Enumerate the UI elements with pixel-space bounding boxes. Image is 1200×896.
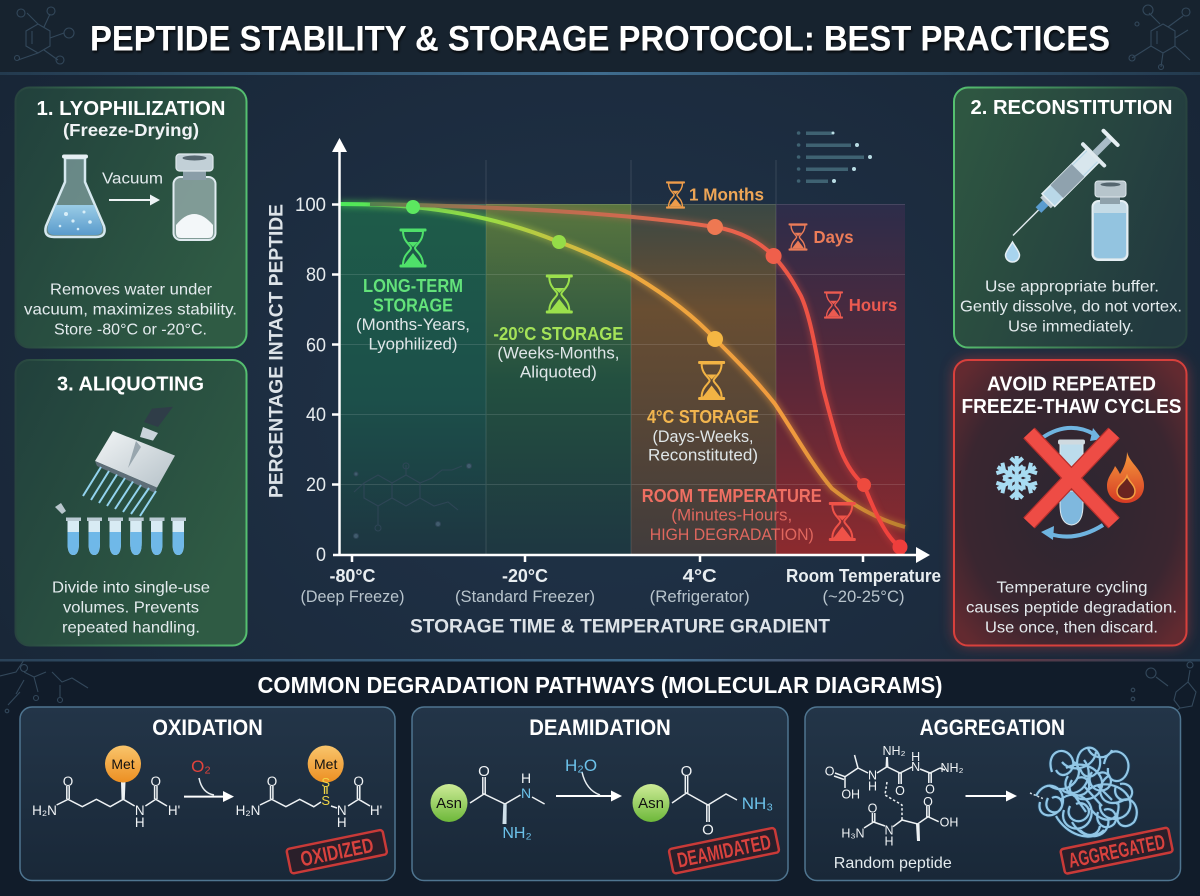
label: random peptide: Random peptide — [834, 855, 952, 872]
molecule: deamidated product: O — [681, 763, 692, 780]
text: freeze-thaw description: causes peptide degradation. — [966, 600, 1177, 616]
icon: red cross — [1029, 433, 1114, 523]
arrow: oxidation reaction: O₂ — [191, 757, 211, 776]
heading: avoid freeze-thaw cycles — [962, 372, 1182, 418]
icon: top-right molecule decoration — [1129, 5, 1190, 70]
icon: tube — [1058, 440, 1085, 525]
molecule: random peptide: N — [911, 760, 920, 774]
molecule: oxidized methionine: N — [337, 803, 347, 818]
chart zone: -20C band — [486, 204, 631, 555]
chart zone: 4C band — [631, 204, 776, 555]
y axis labels: 100 — [295, 195, 326, 216]
y axis labels: 80 — [306, 265, 326, 286]
text: lyophilization description — [24, 282, 237, 338]
icon: flask — [45, 154, 105, 237]
molecule: random peptide: N — [884, 824, 894, 838]
arrow: deamidation reaction — [556, 756, 622, 802]
x axis labels: -80°C — [330, 565, 376, 586]
timeframe: days: Days — [814, 227, 854, 247]
panel: aliquoting — [16, 360, 246, 646]
icon: aggregated peptide tangle — [1030, 748, 1137, 837]
molecule: deamidated product: NH₃ — [742, 794, 773, 813]
icon: bottom-right molecule decoration — [1131, 662, 1196, 716]
icon: cycle arrows — [1041, 428, 1103, 540]
x axis labels: (Standard Freezer) — [455, 588, 595, 606]
label: room temperature — [642, 486, 822, 544]
heading: oxidation: OXIDATION — [152, 715, 263, 740]
label: long-term storage — [356, 276, 470, 354]
icon: hourglass 4C — [698, 361, 725, 400]
panel: oxidation — [20, 707, 395, 880]
molecule: random peptide: OH — [841, 788, 860, 802]
y axis labels: 0 — [316, 545, 326, 566]
icon: data-list decoration — [797, 131, 872, 183]
text: reconstitution description: Use appropriate buffer. — [985, 278, 1159, 296]
label: -20C storage: Aliquoted) — [520, 364, 597, 382]
y axis title: PERCENTAGE INTACT PEPTIDE — [266, 204, 288, 498]
icon: liquid vial — [1092, 181, 1128, 260]
heading: reconstitution: 2. RECONSTITUTION — [970, 96, 1172, 119]
chart: percentage intact peptide vs storage temperature — [266, 131, 941, 637]
icon: open tube cap — [55, 503, 66, 514]
label: 4C storage: (Days-Weeks, — [652, 428, 754, 446]
text: aliquoting description: volumes. Prevents — [63, 600, 199, 616]
timeframe: 1 months: 1 Months — [689, 184, 764, 204]
molecule: oxidized methionine: H₂N — [236, 803, 260, 818]
y axis labels — [295, 195, 326, 566]
label: 4C storage — [647, 407, 759, 464]
molecule: random peptide: O — [925, 782, 935, 796]
text: reconstitution description: Gently dissolve, do not vortex. — [960, 298, 1182, 316]
heading: avoid freeze-thaw cycles: FREEZE-THAW CYCLES — [962, 395, 1182, 418]
x axis labels: -20°C — [502, 565, 548, 586]
molecule: random peptide: O — [895, 784, 905, 798]
molecule: random peptide: H₃N — [841, 826, 865, 840]
stamp: oxidized: OXIDIZED — [298, 834, 376, 871]
arrow: deamidation reaction: H₂O — [565, 756, 597, 775]
molecule: oxidized methionine: O — [353, 774, 364, 789]
y axis labels: 20 — [306, 475, 326, 496]
y axis labels: 40 — [306, 405, 326, 426]
text: reconstitution description — [960, 278, 1182, 336]
y axis labels: 60 — [306, 336, 326, 356]
molecule: oxidized methionine: S — [321, 793, 330, 808]
molecule: asparagine: O — [478, 763, 490, 780]
molecule: deamidated product: O — [702, 822, 714, 838]
axes — [332, 138, 930, 563]
icon: syringe — [1001, 124, 1124, 248]
icon: hourglass room temperature — [829, 502, 856, 541]
x axis labels: (~20-25°C) — [822, 588, 904, 606]
icon: droplet — [1006, 242, 1020, 262]
molecule: random peptide — [825, 744, 964, 848]
molecule: asparagine: NH₂ — [502, 825, 532, 842]
icon: background molecule — [354, 463, 472, 538]
molecule: oxidized methionine — [236, 746, 382, 830]
molecule: random peptide: O — [923, 795, 933, 809]
heading: lyophilization: 1. LYOPHILIZATION — [36, 97, 226, 120]
stamp: aggregated — [1060, 827, 1173, 874]
icon: hourglass long-term — [400, 228, 426, 268]
timeframe: 1 months — [666, 181, 764, 209]
heading: aggregation: AGGREGATION — [920, 715, 1065, 740]
text: aliquoting description: repeated handling. — [62, 620, 200, 636]
arrow: vacuum — [109, 194, 160, 206]
molecule: methionine: H₂N — [32, 803, 57, 818]
label: -20C storage: (Weeks-Months, — [497, 344, 619, 362]
molecule: deamidated product — [632, 763, 773, 838]
label: vacuum: Vacuum — [102, 170, 163, 188]
molecule: random peptide: H — [884, 834, 894, 848]
icon: powder vial — [174, 154, 216, 240]
text: freeze-thaw description: Temperature cycling — [996, 580, 1148, 596]
molecule: asparagine: N — [521, 785, 531, 801]
timeframe: days — [789, 223, 854, 251]
x axis labels — [300, 565, 941, 606]
icon: microtubes — [66, 518, 186, 555]
icon: top-left molecule decoration — [14, 7, 74, 64]
molecule: random peptide: O — [868, 802, 878, 816]
molecule: oxidized methionine: H — [337, 815, 347, 830]
timeframe: hours — [824, 291, 898, 319]
molecule: random peptide: O — [825, 764, 835, 778]
label: long-term storage: STORAGE — [373, 296, 453, 316]
stamp: deamidated — [669, 828, 779, 874]
molecule: asparagine: Asn — [436, 795, 462, 812]
heading: common degradation pathways: COMMON DEGRADATION PATHWAYS (MOLECULAR DIAGRAMS) — [258, 672, 942, 698]
molecule: methionine: O — [63, 774, 73, 789]
panel: avoid freeze-thaw cycles — [954, 360, 1186, 646]
panel: aggregation — [805, 707, 1180, 880]
heading: deamidation: DEAMIDATION — [529, 715, 671, 740]
text: lyophilization description: Store -80°C or -20°C. — [54, 322, 207, 338]
timeframe: hours: Hours — [849, 295, 898, 315]
data points — [406, 200, 908, 554]
chart zone: room temperature band — [776, 204, 905, 555]
arrow: oxidation reaction — [184, 757, 234, 802]
molecule: asparagine — [430, 763, 545, 842]
label: long-term storage: Lyophilized) — [368, 336, 458, 354]
x axis labels: 4°C — [683, 565, 717, 586]
icon: bottom-left molecule decoration — [0, 660, 88, 713]
x axis labels: (Refrigerator) — [650, 588, 750, 606]
text: lyophilization description: vacuum, maximizes stability. — [24, 302, 237, 318]
label: 4C storage: Reconstituted) — [648, 446, 758, 464]
molecule: methionine: Met — [111, 756, 135, 772]
text: freeze-thaw description — [966, 580, 1177, 636]
stamp: deamidated: DEAMIDATED — [675, 831, 773, 872]
label: -20C storage — [493, 324, 623, 382]
subheading: freeze-drying: (Freeze-Drying) — [63, 120, 199, 140]
molecule: oxidized methionine: O — [267, 774, 277, 789]
icon: flame — [1107, 452, 1144, 503]
label: room temperature: ROOM TEMPERATURE — [642, 486, 822, 506]
chart zone: -80C band — [340, 204, 486, 555]
label: room temperature: (Minutes-Hours, — [671, 506, 792, 524]
label: -20C storage: -20°C STORAGE — [493, 324, 623, 344]
molecule: random peptide: N — [868, 768, 877, 782]
molecule: methionine: H' — [168, 803, 180, 818]
curve: room temperature degradation — [370, 204, 900, 547]
molecule: random peptide: NH₂ — [941, 761, 964, 775]
molecule: methionine — [32, 746, 180, 830]
heading: aliquoting: 3. ALIQUOTING — [57, 372, 204, 396]
arrow: aggregation — [966, 790, 1017, 802]
text: reconstitution description: Use immediately. — [1008, 318, 1134, 336]
panel: reconstitution — [954, 88, 1186, 348]
text: aliquoting description: Divide into single-use — [52, 580, 210, 596]
panel: deamidation — [412, 707, 788, 880]
icon: hourglass -20C — [546, 274, 573, 314]
molecule: oxidized methionine: S — [321, 775, 330, 790]
panel: lyophilization — [16, 88, 246, 348]
label: long-term storage: LONG-TERM — [363, 276, 463, 296]
molecule: random peptide: H — [868, 780, 877, 794]
title: PEPTIDE STABILITY & STORAGE PROTOCOL: BEST PRACTICES — [90, 20, 1110, 58]
molecule: methionine: O — [151, 774, 161, 789]
label: room temperature: HIGH DEGRADATION) — [650, 526, 814, 544]
molecule: methionine: H — [135, 815, 145, 830]
molecule: methionine: N — [135, 803, 145, 818]
heading: avoid freeze-thaw cycles: AVOID REPEATED — [987, 372, 1156, 396]
label: long-term storage: (Months-Years, — [356, 316, 470, 334]
molecule: deamidated product: Asn — [638, 795, 664, 812]
x axis labels: (Deep Freeze) — [300, 588, 404, 606]
molecule: random peptide: H — [911, 750, 920, 764]
x axis title: STORAGE TIME & TEMPERATURE GRADIENT — [410, 616, 830, 638]
molecule: oxidized methionine: H' — [370, 803, 382, 818]
curve: refrigerated and frozen stability — [340, 204, 905, 527]
icon: snowflake — [994, 456, 1039, 500]
text: lyophilization description: Removes water under — [50, 282, 213, 298]
text: freeze-thaw description: Use once, then discard. — [985, 620, 1158, 636]
molecule: random peptide: NH₂ — [883, 744, 906, 758]
molecule: random peptide: OH — [940, 816, 958, 830]
icon: multichannel pipette — [83, 407, 175, 516]
text: aliquoting description — [52, 580, 210, 636]
molecule: oxidized methionine: Met — [314, 756, 337, 772]
molecule: asparagine: H — [521, 770, 531, 786]
label: 4C storage: 4°C STORAGE — [647, 407, 759, 427]
x axis labels: Room Temperature — [786, 565, 941, 586]
